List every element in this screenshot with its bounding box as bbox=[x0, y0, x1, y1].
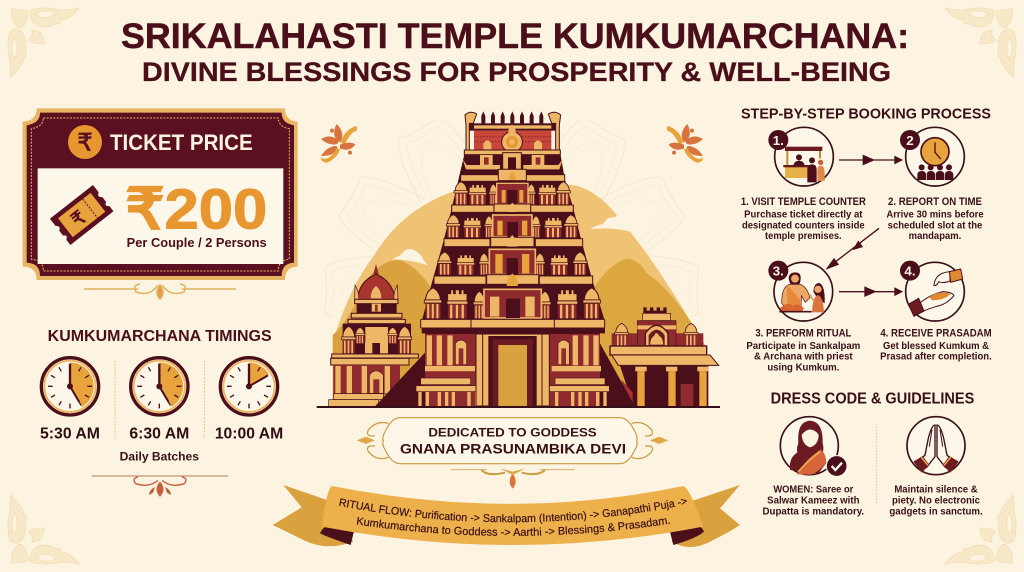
icon: namaste hands bbox=[907, 417, 965, 475]
panel: deity dedication bbox=[357, 418, 668, 489]
arrow: step 2 to 3 bbox=[827, 228, 879, 268]
step 2 badge bbox=[900, 130, 920, 150]
sun disc bbox=[333, 185, 703, 407]
icon: rupee coin: ₹ bbox=[77, 130, 93, 157]
step 2 text: mandapam. bbox=[909, 231, 962, 242]
left shrine bbox=[329, 264, 418, 406]
main gopuram tower bbox=[375, 111, 635, 406]
step 4 badge: 4. bbox=[904, 264, 916, 279]
white price area bbox=[38, 168, 283, 264]
walls beside gopuram bbox=[375, 343, 635, 406]
step 2 badge: 2 bbox=[906, 133, 914, 148]
title line 1: SRIKALAHASTI TEMPLE KUMKUMARCHANA: bbox=[121, 17, 909, 56]
women dress code text bbox=[762, 484, 864, 517]
right mandapa bbox=[610, 307, 719, 406]
step 3 text: using Kumkum. bbox=[767, 362, 840, 373]
ribbon text: Kumkumarchana to Goddess -> Aarthi -> Blessings & Prasadam. bbox=[356, 516, 670, 536]
step 4 text: 4. RECEIVE PRASADAM bbox=[880, 327, 992, 339]
dedication line 2: GNANA PRASUNAMBIKA DEVI bbox=[400, 440, 626, 456]
step 3 text: Participate in Sankalpam bbox=[746, 341, 860, 352]
panel: timings bbox=[40, 328, 283, 496]
icon: ticket bbox=[50, 185, 113, 245]
conduct guideline text: Maintain silence & bbox=[894, 484, 978, 495]
title line 2: DIVINE BLESSINGS FOR PROSPERITY & WELL-BEING bbox=[142, 57, 891, 87]
time labels: 10:00 AM bbox=[215, 425, 283, 442]
ribbon fold left bbox=[320, 525, 354, 545]
top crown bbox=[465, 111, 561, 152]
daily batches note: Daily Batches bbox=[120, 450, 199, 463]
dress code heading: DRESS CODE & GUIDELINES bbox=[771, 390, 974, 407]
icon: ticket: ₹ bbox=[68, 207, 90, 231]
price note: Per Couple / 2 Persons bbox=[127, 236, 267, 250]
conduct guideline text: gadgets in sanctum. bbox=[889, 506, 983, 517]
ticket price heading: TICKET PRICE bbox=[110, 130, 253, 155]
step 2 text: scheduled slot at the bbox=[888, 220, 983, 231]
clock: 10:00 am bbox=[220, 358, 278, 415]
tier 1 bbox=[454, 182, 468, 204]
ribbon fold right bbox=[670, 525, 704, 545]
step 4 text: Get blessed Kumkum & bbox=[883, 341, 989, 352]
step 1 text bbox=[741, 196, 866, 242]
step 2 text: Arrive 30 mins before bbox=[886, 210, 984, 221]
conduct guideline text bbox=[889, 484, 983, 517]
arrow: step 1 to 2 bbox=[839, 156, 902, 164]
corner ornament: top left bbox=[8, 8, 79, 77]
icon: woman in saree bbox=[780, 417, 838, 475]
arrow: step 3 to 4 bbox=[839, 287, 902, 296]
step 4 badge bbox=[900, 261, 920, 281]
step 3 icon: ritual bbox=[774, 262, 833, 321]
ribbon text bbox=[339, 498, 687, 536]
panel: dress code and guidelines bbox=[762, 390, 983, 517]
tier 4 bbox=[424, 288, 442, 318]
step 3 badge: 3. bbox=[773, 264, 784, 279]
tower silhouette bbox=[422, 152, 605, 333]
step 2 text: 2. REPORT ON TIME bbox=[888, 196, 982, 208]
women dress code text: WOMEN: Saree or bbox=[773, 484, 853, 495]
tier 3 bbox=[438, 252, 452, 275]
icon: check badge bbox=[826, 456, 847, 476]
clock: 6:30 am bbox=[131, 358, 188, 415]
panel: booking process bbox=[741, 105, 992, 373]
ornament below ticket bbox=[84, 284, 236, 299]
booking heading: STEP-BY-STEP BOOKING PROCESS bbox=[741, 105, 991, 122]
step 1 text: temple premises. bbox=[765, 231, 842, 242]
step 3 text: & Archana with priest bbox=[754, 352, 853, 363]
mountains bbox=[333, 260, 432, 407]
step 1 badge bbox=[768, 130, 788, 150]
ribbon band bbox=[322, 486, 703, 545]
panel: ticket price bbox=[23, 108, 298, 280]
step 1 text: designated counters inside bbox=[742, 220, 865, 231]
step 1 badge: 1. bbox=[773, 133, 784, 148]
ribbon tail left bbox=[273, 485, 353, 546]
tier 2 bbox=[446, 215, 460, 237]
step 3 text bbox=[746, 327, 860, 373]
gopuram door bbox=[476, 334, 549, 406]
gopuram ground storey bbox=[425, 330, 600, 406]
step 2 text bbox=[886, 196, 984, 242]
step 2 icon: clock and people bbox=[906, 127, 964, 186]
time labels: 6:30 AM bbox=[129, 425, 189, 442]
floral ornament right bbox=[667, 124, 703, 163]
cartouche frame bbox=[357, 418, 668, 464]
step 4 text bbox=[880, 327, 992, 363]
timings heading: KUMKUMARCHANA TIMINGS bbox=[48, 328, 272, 345]
ribbon tail right bbox=[672, 485, 740, 547]
women dress code text: Salwar Kameez with bbox=[767, 495, 859, 506]
ticket frame bbox=[23, 108, 298, 280]
floral ornament left bbox=[321, 124, 357, 163]
step 3 badge bbox=[768, 261, 788, 281]
corner ornament: top right bbox=[945, 8, 1016, 77]
dedication line 1: DEDICATED TO GODDESS bbox=[428, 426, 597, 440]
clock: 5:30 am bbox=[41, 358, 99, 415]
step 4 text: Prasad after completion. bbox=[880, 352, 992, 363]
corner ornament: bottom left bbox=[8, 495, 79, 564]
step 3 text: 3. PERFORM RITUAL bbox=[755, 327, 851, 339]
icon: rupee coin bbox=[68, 125, 102, 159]
conduct guideline text: piety. No electronic bbox=[892, 495, 980, 506]
step 1 text: Purchase ticket directly at bbox=[744, 210, 863, 221]
divider ornament bbox=[451, 468, 575, 489]
timings divider ornament bbox=[92, 476, 228, 496]
step 1 text: 1. VISIT TEMPLE COUNTER bbox=[741, 196, 866, 208]
central illustration: temple bbox=[317, 103, 720, 408]
mandala backdrop bbox=[325, 103, 699, 325]
corner ornament: bottom right bbox=[945, 495, 1016, 564]
ribbon text: RITUAL FLOW: Purification -> Sankalpam (Intention) -> Ganapathi Puja -> bbox=[339, 498, 687, 524]
step 4 icon: prasadam hands bbox=[906, 262, 964, 321]
price amount: ₹200 bbox=[125, 179, 267, 242]
tier 1 ledge bbox=[461, 175, 565, 181]
ground line bbox=[317, 406, 720, 408]
time labels bbox=[40, 425, 283, 442]
women dress code text: Dupatta is mandatory. bbox=[762, 506, 864, 517]
time labels: 5:30 AM bbox=[40, 425, 100, 442]
title bbox=[121, 17, 909, 87]
step 1 icon: temple counter bbox=[775, 127, 833, 186]
ribbon: ritual flow bbox=[272, 485, 740, 548]
clouds bbox=[392, 249, 428, 265]
